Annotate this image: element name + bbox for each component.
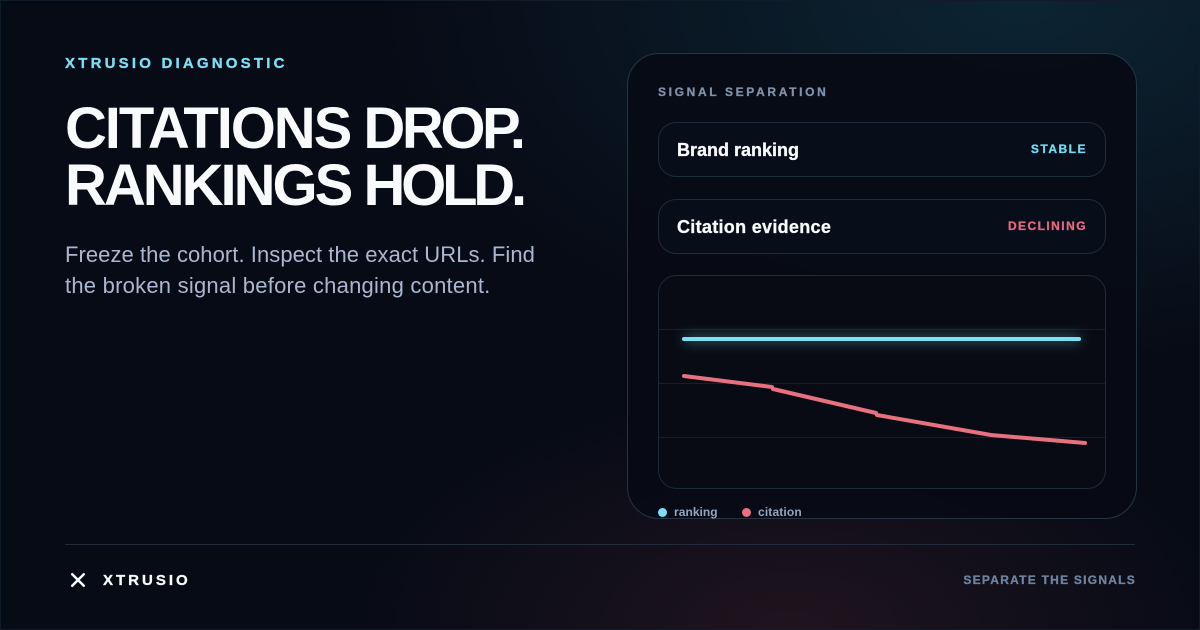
row: citation evidence <box>658 199 1106 254</box>
status: stable: STABLE <box>1031 142 1087 156</box>
panel heading: SIGNAL SEPARATION <box>658 85 828 99</box>
row: brand ranking <box>658 122 1106 177</box>
ranking line <box>684 336 1080 342</box>
brand name: XTRUSIO <box>103 572 191 589</box>
legend: ranking: ranking <box>674 504 718 518</box>
panel: signal separation <box>627 53 1137 519</box>
legend: citation: citation <box>758 504 802 518</box>
subtitle: the broken signal before changing content. <box>65 272 491 298</box>
footer tagline: SEPARATE THE SIGNALS <box>963 573 1136 587</box>
title: RANKINGS HOLD. <box>65 153 523 218</box>
status: declining: DECLINING <box>1008 219 1087 233</box>
row label: Brand ranking <box>677 140 799 160</box>
icon: brand x <box>70 572 86 588</box>
legend <box>658 504 802 518</box>
eyebrow: XTRUSIO DIAGNOSTIC <box>65 55 288 72</box>
title: CITATIONS DROP. <box>65 96 523 161</box>
citation line <box>684 376 1085 443</box>
row label: Citation evidence <box>677 216 831 236</box>
title <box>65 96 524 218</box>
subtitle: Freeze the cohort. Inspect the exact URLs. Find <box>65 242 535 267</box>
subtitle <box>65 242 535 298</box>
line chart <box>658 275 1106 489</box>
